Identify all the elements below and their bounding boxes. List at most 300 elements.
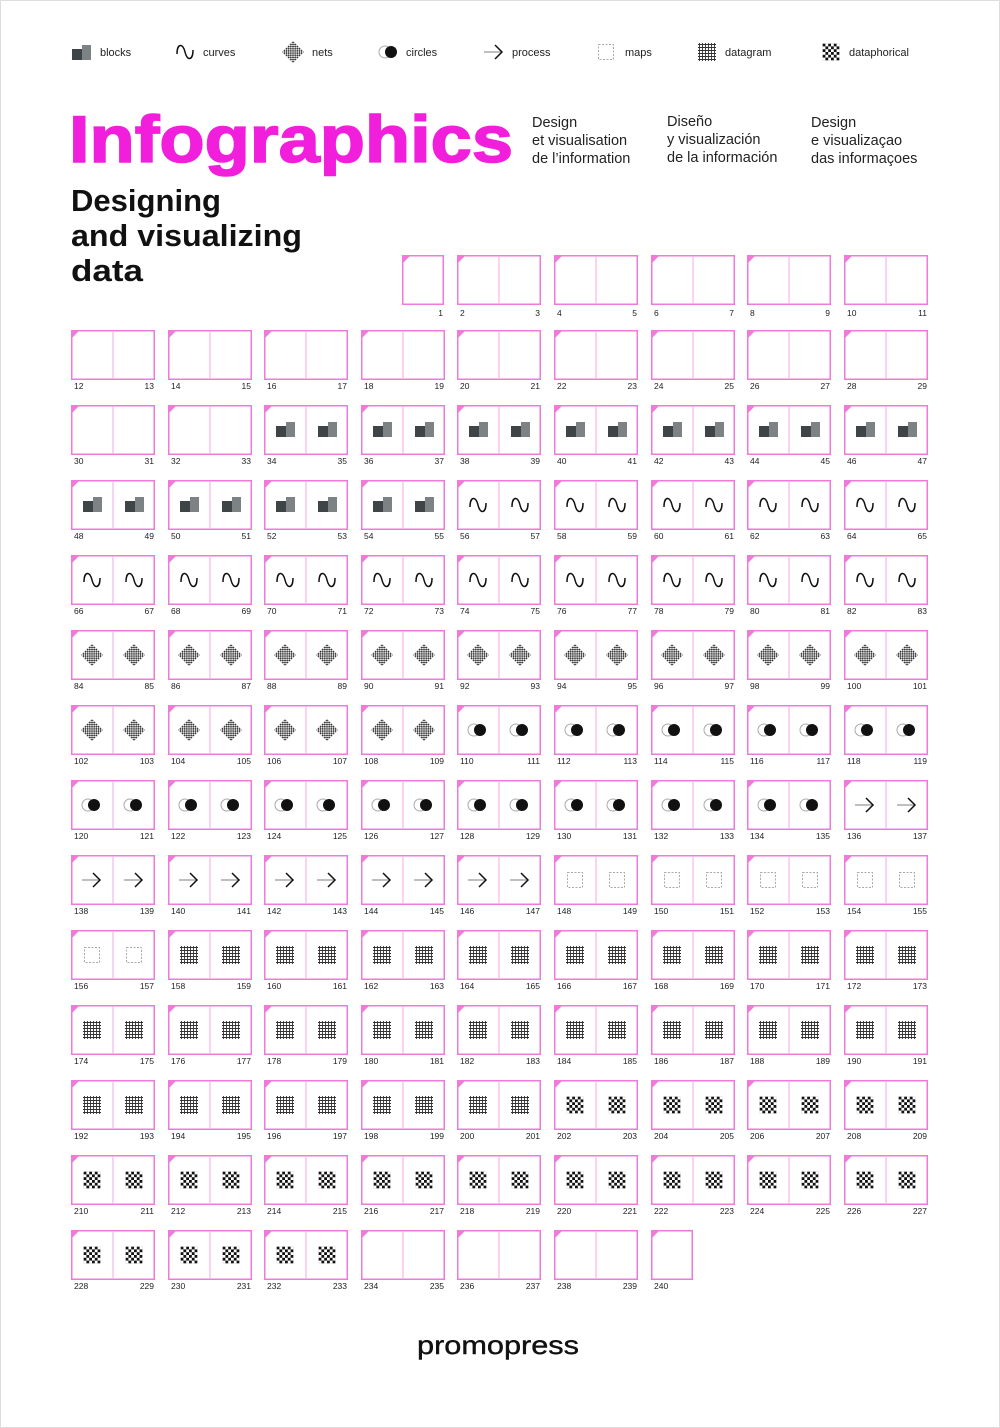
spread 98-99: [747, 630, 830, 691]
spread 138-139: 138: [74, 906, 88, 916]
spread 48-49: 48: [74, 531, 84, 541]
spread 66-67: 66: [74, 606, 84, 616]
spread 110-111: [457, 705, 540, 766]
spread 152-153: [747, 855, 830, 916]
spread 10-11: 11: [918, 308, 927, 318]
spread 62-63: 62: [750, 531, 760, 541]
legend: dataphorical: [823, 44, 909, 60]
spread 70-71: [264, 555, 347, 616]
spread 116-117: [747, 705, 830, 766]
spread 206-207: 206: [750, 1131, 764, 1141]
spread 8-9: [747, 255, 830, 318]
spread 170-171: 171: [816, 981, 830, 991]
spread 66-67: [71, 555, 154, 616]
spread 16-17: 16: [267, 381, 277, 391]
spread 146-147: 146: [460, 906, 474, 916]
spread 136-137: [844, 780, 927, 841]
spread 230-231: 230: [171, 1281, 185, 1291]
legend: maps: maps: [625, 47, 652, 59]
subtitle: Designing: [71, 183, 221, 218]
spread 180-181: [361, 1005, 444, 1066]
spread 36-37: [361, 405, 444, 466]
spread 230-231: [168, 1230, 251, 1291]
spread 208-209: 209: [913, 1131, 927, 1141]
legend: curves: curves: [203, 47, 236, 59]
spread 96-97: [651, 630, 734, 691]
spread 210-211: 211: [140, 1206, 154, 1216]
spread 62-63: 63: [821, 531, 830, 541]
spread 98-99: 99: [821, 681, 830, 691]
spread 140-141: 141: [237, 906, 251, 916]
spread 134-135: 134: [750, 831, 764, 841]
spread 158-159: [168, 930, 251, 991]
spread 220-221: 220: [557, 1206, 571, 1216]
spread 198-199: [361, 1080, 444, 1141]
spread 16-17: [264, 330, 347, 391]
spread 68-69: 69: [242, 606, 251, 616]
spread 84-85: [71, 630, 154, 691]
spread 50-51: 50: [171, 531, 181, 541]
spread 210-211: 210: [74, 1206, 88, 1216]
spread 58-59: 58: [557, 531, 567, 541]
spread 138-139: 139: [140, 906, 154, 916]
spread 104-105: [168, 705, 251, 766]
spread 132-133: 132: [654, 831, 668, 841]
spread 48-49: [71, 480, 154, 541]
spread 82-83: [844, 555, 927, 616]
spread 50-51: [168, 480, 251, 541]
spread 134-135: [747, 780, 830, 841]
spread 58-59: 59: [628, 531, 637, 541]
spread 176-177: [168, 1005, 251, 1066]
spread 98-99: 98: [750, 681, 760, 691]
spread 32-33: 33: [242, 456, 251, 466]
spread 106-107: 106: [267, 756, 281, 766]
spread 154-155: 154: [847, 906, 861, 916]
spread 148-149: [554, 855, 637, 916]
spread 78-79: 78: [654, 606, 664, 616]
spread 44-45: 44: [750, 456, 760, 466]
spread 78-79: 79: [725, 606, 734, 616]
spread 94-95: 94: [557, 681, 567, 691]
spread 164-165: 165: [526, 981, 540, 991]
spread 224-225: 224: [750, 1206, 764, 1216]
spread 40-41: 41: [628, 456, 637, 466]
spread 182-183: 183: [526, 1056, 540, 1066]
spread 34-35: [264, 405, 347, 466]
legend: nets: nets: [312, 47, 333, 59]
spread 96-97: 96: [654, 681, 664, 691]
spread 88-89: 89: [338, 681, 347, 691]
spread 118-119: 118: [847, 756, 861, 766]
legend: nets: [282, 41, 333, 63]
spread 92-93: 93: [531, 681, 540, 691]
spread 176-177: 177: [237, 1056, 251, 1066]
spread 116-117: 116: [750, 756, 764, 766]
spread 106-107: 107: [333, 756, 347, 766]
spread 68-69: 68: [171, 606, 181, 616]
spread 126-127: 126: [364, 831, 378, 841]
spread 54-55: [361, 480, 444, 541]
spread 106-107: [264, 705, 347, 766]
spread 144-145: 145: [430, 906, 444, 916]
spread 212-213: 213: [237, 1206, 251, 1216]
spread 58-59: [554, 480, 637, 541]
spread 172-173: 172: [847, 981, 861, 991]
page 1: 1: [438, 308, 443, 318]
spread 136-137: 137: [913, 831, 927, 841]
spread 90-91: [361, 630, 444, 691]
spread 34-35: 34: [267, 456, 277, 466]
spread 196-197: 196: [267, 1131, 281, 1141]
spread 76-77: 77: [628, 606, 637, 616]
spread 112-113: [554, 705, 637, 766]
spread 194-195: 195: [237, 1131, 251, 1141]
spread 60-61: 60: [654, 531, 664, 541]
legend: [72, 41, 909, 63]
spread 90-91: 90: [364, 681, 374, 691]
spread 110-111: 110: [460, 756, 474, 766]
legend: blocks: [72, 45, 132, 60]
spread 76-77: 76: [557, 606, 567, 616]
spread 234-235: [361, 1230, 444, 1291]
spread 148-149: 149: [623, 906, 637, 916]
spread 88-89: 88: [267, 681, 277, 691]
spread 178-179: 178: [267, 1056, 281, 1066]
spread 38-39: 38: [460, 456, 470, 466]
spread 168-169: [651, 930, 734, 991]
spread 232-233: 233: [333, 1281, 347, 1291]
page 1: [402, 255, 443, 318]
spread 80-81: 81: [821, 606, 830, 616]
spread 190-191: 190: [847, 1056, 861, 1066]
spread 198-199: 199: [430, 1131, 444, 1141]
spread 92-93: 92: [460, 681, 470, 691]
spread 210-211: [71, 1155, 154, 1216]
spread 46-47: 47: [918, 456, 927, 466]
spread 134-135: 135: [816, 831, 830, 841]
spread 60-61: 61: [725, 531, 734, 541]
spread 162-163: 162: [364, 981, 378, 991]
spread 220-221: 221: [623, 1206, 637, 1216]
spread 222-223: [651, 1155, 734, 1216]
spread 166-167: 166: [557, 981, 571, 991]
spread 52-53: 52: [267, 531, 277, 541]
page grid: [71, 255, 927, 1291]
spread 68-69: [168, 555, 251, 616]
spread 236-237: 237: [526, 1281, 540, 1291]
spread 38-39: [457, 405, 540, 466]
spread 228-229: 229: [140, 1281, 154, 1291]
spread 82-83: 83: [918, 606, 927, 616]
spread 202-203: [554, 1080, 637, 1141]
spread 222-223: 222: [654, 1206, 668, 1216]
spread 184-185: 184: [557, 1056, 571, 1066]
spread 90-91: 91: [435, 681, 444, 691]
spread 174-175: [71, 1005, 154, 1066]
spread 226-227: [844, 1155, 927, 1216]
spread 196-197: [264, 1080, 347, 1141]
spread 158-159: 158: [171, 981, 185, 991]
spread 22-23: 22: [557, 381, 567, 391]
translation: Portuguese: e visualizaçao: [811, 133, 902, 149]
spread 170-171: 170: [750, 981, 764, 991]
spread 156-157: 157: [140, 981, 154, 991]
spread 78-79: [651, 555, 734, 616]
spread 86-87: [168, 630, 251, 691]
legend: dataphorical: dataphorical: [849, 47, 909, 59]
spread 202-203: 203: [623, 1131, 637, 1141]
spread 70-71: 70: [267, 606, 277, 616]
spread 82-83: 82: [847, 606, 857, 616]
spread 142-143: [264, 855, 347, 916]
legend: datagram: datagram: [725, 47, 771, 59]
spread 218-219: 219: [526, 1206, 540, 1216]
spread 130-131: 131: [623, 831, 637, 841]
spread 40-41: [554, 405, 637, 466]
subtitle: data: [71, 253, 144, 288]
spread 232-233: 232: [267, 1281, 281, 1291]
spread 142-143: 142: [267, 906, 281, 916]
spread 152-153: 152: [750, 906, 764, 916]
spread 190-191: 191: [913, 1056, 927, 1066]
spread 198-199: 198: [364, 1131, 378, 1141]
spread 16-17: 17: [338, 381, 347, 391]
spread 36-37: 37: [435, 456, 444, 466]
subtitle: and visualizing: [71, 218, 302, 253]
spread 72-73: [361, 555, 444, 616]
spread 226-227: 226: [847, 1206, 861, 1216]
spread 180-181: 180: [364, 1056, 378, 1066]
spread 42-43: 43: [725, 456, 734, 466]
spread 4-5: 5: [632, 308, 637, 318]
spread 52-53: 53: [338, 531, 347, 541]
spread 104-105: 104: [171, 756, 185, 766]
spread 64-65: 65: [918, 531, 927, 541]
spread 224-225: 225: [816, 1206, 830, 1216]
spread 156-157: 156: [74, 981, 88, 991]
spread 102-103: 102: [74, 756, 88, 766]
spread 194-195: [168, 1080, 251, 1141]
spread 124-125: 125: [333, 831, 347, 841]
spread 20-21: 21: [531, 381, 540, 391]
spread 204-205: 205: [720, 1131, 734, 1141]
spread 120-121: [71, 780, 154, 841]
spread 122-123: 122: [171, 831, 185, 841]
translations: [532, 114, 917, 167]
spread 46-47: 46: [847, 456, 857, 466]
spread 100-101: 100: [847, 681, 861, 691]
spread 108-109: 108: [364, 756, 378, 766]
legend: circles: [379, 46, 438, 59]
spread 84-85: 85: [145, 681, 154, 691]
spread 154-155: [844, 855, 927, 916]
spread 28-29: 28: [847, 381, 857, 391]
translation: Portuguese: Design: [811, 115, 856, 131]
spread 100-101: [844, 630, 927, 691]
spread 232-233: [264, 1230, 347, 1291]
spread 14-15: [168, 330, 251, 391]
spread 200-201: 201: [526, 1131, 540, 1141]
legend: datagram: [698, 43, 771, 61]
spread 12-13: 12: [74, 381, 84, 391]
spread 74-75: [457, 555, 540, 616]
legend: blocks: blocks: [100, 47, 132, 59]
spread 136-137: 136: [847, 831, 861, 841]
spread 20-21: [457, 330, 540, 391]
spread 220-221: [554, 1155, 637, 1216]
spread 160-161: [264, 930, 347, 991]
legend: process: [484, 45, 551, 59]
spread 144-145: 144: [364, 906, 378, 916]
spread 174-175: 174: [74, 1056, 88, 1066]
spread 170-171: [747, 930, 830, 991]
spread 142-143: 143: [333, 906, 347, 916]
spread 172-173: 173: [913, 981, 927, 991]
spread 144-145: [361, 855, 444, 916]
spread 158-159: 159: [237, 981, 251, 991]
spread 230-231: 231: [237, 1281, 251, 1291]
spread 234-235: 234: [364, 1281, 378, 1291]
spread 18-19: [361, 330, 444, 391]
spread 60-61: [651, 480, 734, 541]
spread 44-45: [747, 405, 830, 466]
spread 114-115: [651, 705, 734, 766]
spread 146-147: [457, 855, 540, 916]
spread 80-81: 80: [750, 606, 760, 616]
spread 152-153: 153: [816, 906, 830, 916]
spread 154-155: 155: [913, 906, 927, 916]
spread 214-215: 215: [333, 1206, 347, 1216]
translation: Spanish: Diseño: [667, 114, 712, 130]
spread 218-219: 218: [460, 1206, 474, 1216]
spread 12-13: [71, 330, 154, 391]
spread 200-201: 200: [460, 1131, 474, 1141]
spread 176-177: 176: [171, 1056, 185, 1066]
translation: French: et visualisation: [532, 133, 627, 149]
spread 188-189: 188: [750, 1056, 764, 1066]
spread 114-115: 115: [720, 756, 734, 766]
spread 128-129: [457, 780, 540, 841]
spread 238-239: 239: [623, 1281, 637, 1291]
spread 94-95: 95: [628, 681, 637, 691]
spread 186-187: [651, 1005, 734, 1066]
spread 178-179: [264, 1005, 347, 1066]
spread 62-63: [747, 480, 830, 541]
spread 22-23: 23: [628, 381, 637, 391]
spread 206-207: [747, 1080, 830, 1141]
spread 228-229: 228: [74, 1281, 88, 1291]
spread 8-9: 8: [750, 308, 755, 318]
spread 164-165: [457, 930, 540, 991]
spread 172-173: [844, 930, 927, 991]
spread 182-183: 182: [460, 1056, 474, 1066]
spread 238-239: 238: [557, 1281, 571, 1291]
spread 162-163: 163: [430, 981, 444, 991]
spread 70-71: 71: [338, 606, 347, 616]
spread 24-25: 24: [654, 381, 664, 391]
spread 186-187: 187: [720, 1056, 734, 1066]
spread 194-195: 194: [171, 1131, 185, 1141]
spread 212-213: [168, 1155, 251, 1216]
spread 34-35: 35: [338, 456, 347, 466]
spread 130-131: 130: [557, 831, 571, 841]
spread 4-5: [554, 255, 637, 318]
translation: French: de l’information: [532, 151, 630, 167]
spread 50-51: 51: [242, 531, 251, 541]
spread 74-75: 74: [460, 606, 470, 616]
spread 28-29: 29: [918, 381, 927, 391]
spread 14-15: 14: [171, 381, 181, 391]
spread 132-133: 133: [720, 831, 734, 841]
spread 26-27: 27: [821, 381, 830, 391]
spread 150-151: 150: [654, 906, 668, 916]
spread 100-101: 101: [913, 681, 927, 691]
spread 86-87: 86: [171, 681, 181, 691]
spread 188-189: 189: [816, 1056, 830, 1066]
spread 18-19: 19: [435, 381, 444, 391]
spread 46-47: [844, 405, 927, 466]
spread 2-3: [457, 255, 540, 318]
legend: circles: circles: [406, 47, 438, 59]
translation: Portuguese: das informaçoes: [811, 151, 917, 167]
spread 66-67: 67: [145, 606, 154, 616]
spread 192-193: [71, 1080, 154, 1141]
spread 132-133: [651, 780, 734, 841]
spread 128-129: 129: [526, 831, 540, 841]
spread 26-27: 26: [750, 381, 760, 391]
spread 184-185: [554, 1005, 637, 1066]
spread 32-33: [168, 405, 251, 466]
spread 124-125: 124: [267, 831, 281, 841]
spread 156-157: [71, 930, 154, 991]
spread 104-105: 105: [237, 756, 251, 766]
legend: process: process: [512, 47, 551, 59]
spread 2-3: 2: [460, 308, 465, 318]
spread 190-191: [844, 1005, 927, 1066]
spread 178-179: 179: [333, 1056, 347, 1066]
spread 234-235: 235: [430, 1281, 444, 1291]
spread 208-209: [844, 1080, 927, 1141]
spread 150-151: 151: [720, 906, 734, 916]
spread 128-129: 128: [460, 831, 474, 841]
spread 86-87: 87: [242, 681, 251, 691]
spread 208-209: 208: [847, 1131, 861, 1141]
spread 56-57: 57: [531, 531, 540, 541]
spread 236-237: 236: [460, 1281, 474, 1291]
page 240: [651, 1230, 692, 1291]
spread 160-161: 160: [267, 981, 281, 991]
page 240: 240: [654, 1281, 668, 1291]
spread 192-193: 192: [74, 1131, 88, 1141]
spread 44-45: 45: [821, 456, 830, 466]
spread 14-15: 15: [242, 381, 251, 391]
spread 36-37: 36: [364, 456, 374, 466]
spread 164-165: 164: [460, 981, 474, 991]
spread 228-229: [71, 1230, 154, 1291]
spread 102-103: 103: [140, 756, 154, 766]
legend: maps: [598, 44, 652, 60]
spread 212-213: 212: [171, 1206, 185, 1216]
spread 196-197: 197: [333, 1131, 347, 1141]
spread 224-225: [747, 1155, 830, 1216]
translation: Spanish: de la información: [667, 150, 777, 166]
spread 120-121: 121: [140, 831, 154, 841]
spread 214-215: [264, 1155, 347, 1216]
spread 184-185: 185: [623, 1056, 637, 1066]
spread 114-115: 114: [654, 756, 668, 766]
spread 182-183: [457, 1005, 540, 1066]
